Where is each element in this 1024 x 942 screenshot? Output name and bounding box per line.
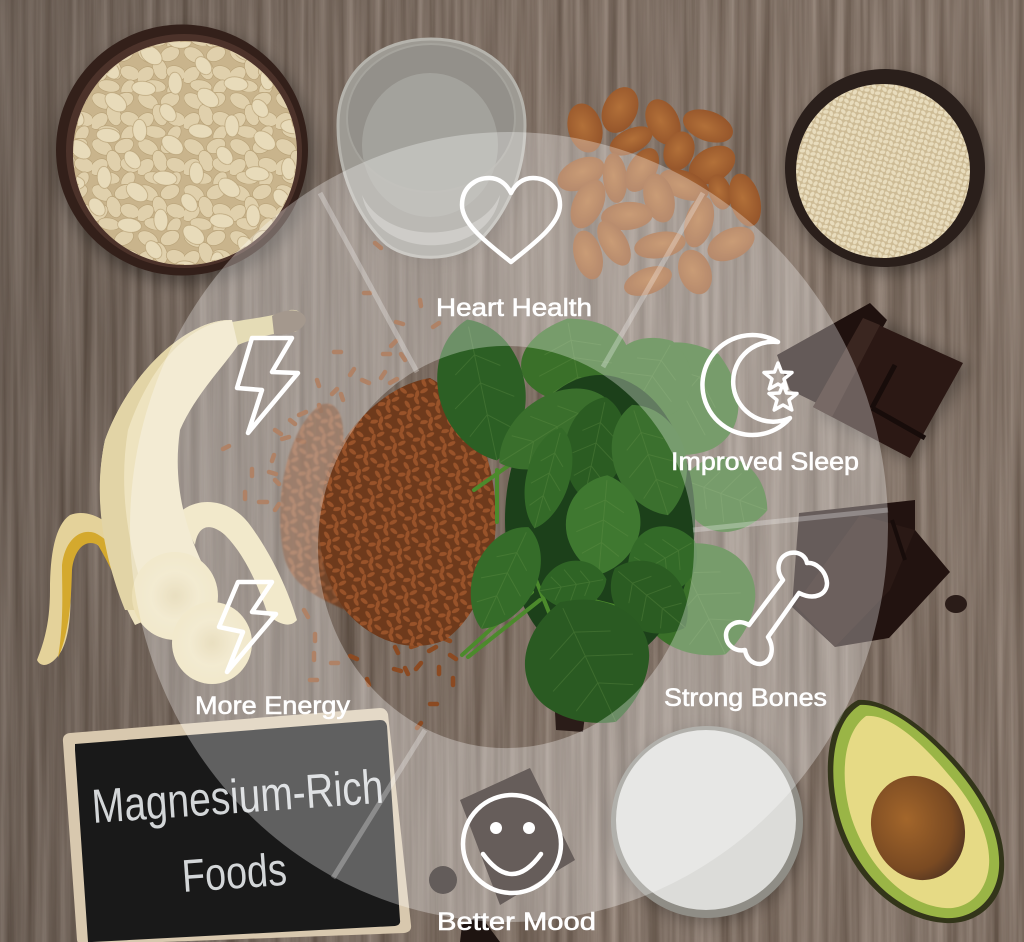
- chalkboard sign: [63, 708, 411, 942]
- label: heart health: Heart Health: [436, 294, 592, 322]
- left peel: [37, 513, 140, 665]
- benefit: strong bones: [664, 553, 827, 712]
- chocolate crumb: [945, 595, 967, 613]
- fruit body: [100, 320, 238, 625]
- label: more energy: More Energy: [195, 692, 351, 720]
- scattered flax seeds: [223, 243, 456, 728]
- sesame bowl: [785, 69, 988, 273]
- label: improved sleep: Improved Sleep: [671, 448, 859, 476]
- oats bowl: [56, 24, 314, 284]
- icon: bone: [726, 553, 827, 664]
- banana slices: [132, 552, 218, 640]
- benefit: better mood: [437, 795, 596, 936]
- icon: lightning bolt: [219, 582, 276, 672]
- label: strong bones: Strong Bones: [664, 684, 827, 712]
- icon: smiley face: [463, 795, 561, 893]
- banana: [37, 310, 306, 684]
- dark chocolate upper right: [777, 303, 970, 462]
- front leaves: [425, 311, 711, 748]
- benefit: more energy: [195, 582, 351, 720]
- benefit: improved sleep: [671, 335, 859, 476]
- right peel: [180, 502, 297, 625]
- chalk subheading: Foods: [180, 843, 288, 902]
- chocolate pieces bottom centre: [429, 712, 585, 942]
- flax seed heap: [280, 378, 496, 646]
- chalk heading: Magnesium-Rich: [90, 761, 385, 834]
- almonds: [552, 81, 766, 302]
- water glass: [338, 39, 525, 260]
- icon: moon and stars: [702, 335, 797, 435]
- translucent benefits ring: [130, 132, 888, 922]
- avocado pit: [855, 762, 981, 894]
- avocado: [828, 700, 1004, 923]
- banana stem: [232, 310, 303, 345]
- stems: [462, 440, 650, 657]
- benefit: heart health: [436, 178, 592, 322]
- milk glass: [611, 726, 804, 922]
- label: better mood: Better Mood: [437, 908, 596, 936]
- spinach bunch: [425, 309, 780, 748]
- icon: heart: [462, 178, 560, 262]
- back leaves: [514, 309, 780, 679]
- benefit: more energy, upper bolt: [237, 338, 298, 433]
- dark chocolate lower right: [792, 500, 950, 647]
